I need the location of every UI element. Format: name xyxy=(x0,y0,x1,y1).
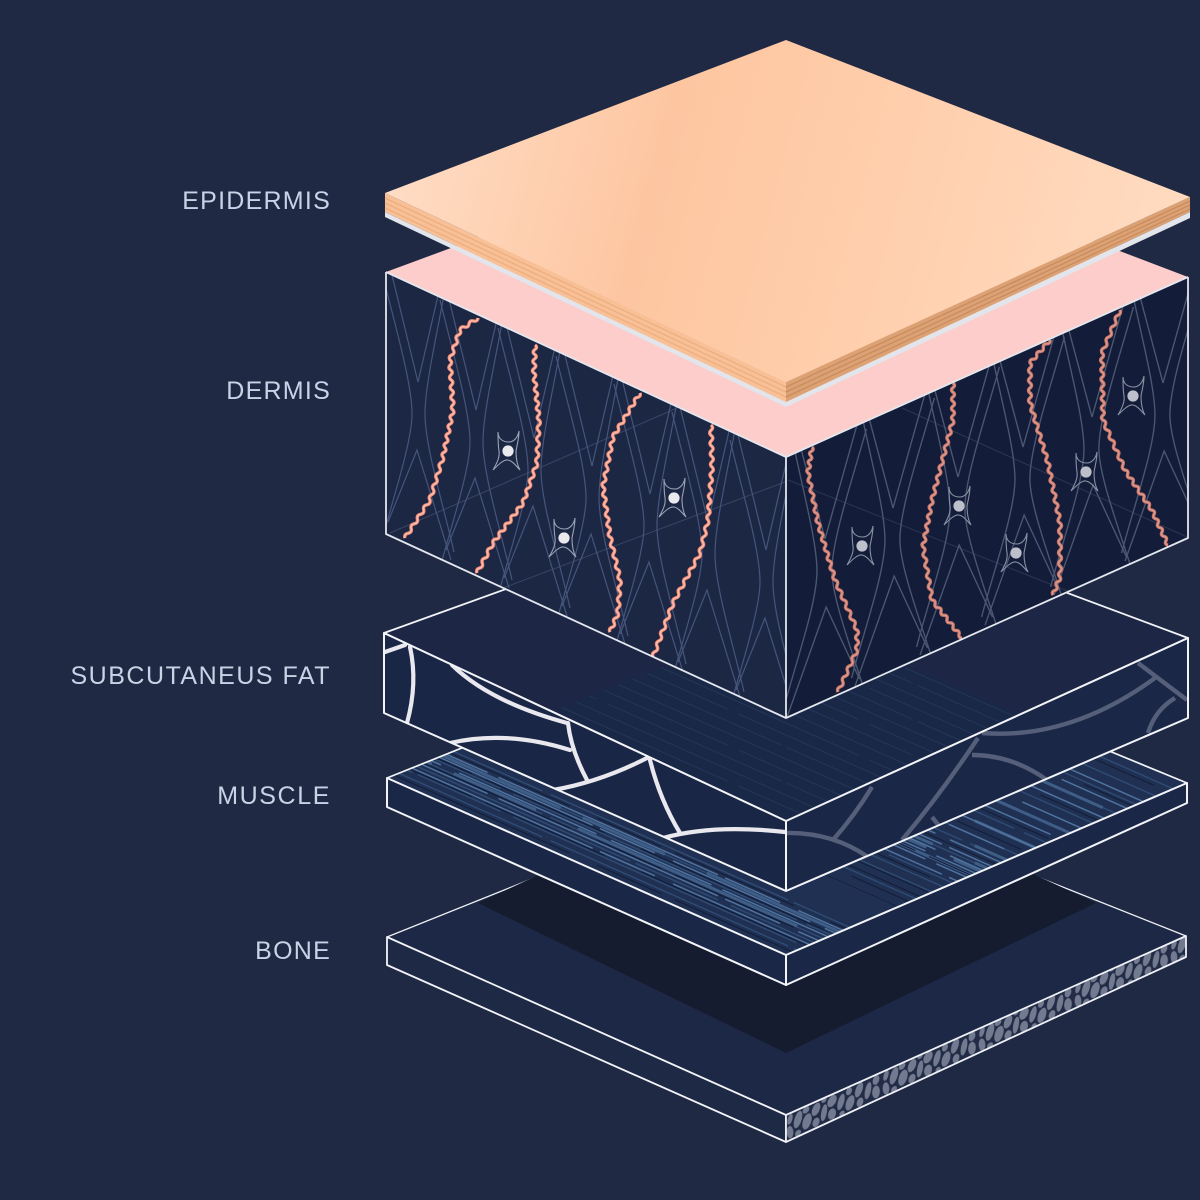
collagen fibres left xyxy=(386,276,786,696)
dermis right face xyxy=(784,268,1200,718)
muscle right side xyxy=(786,783,1187,985)
fibroblast cells left xyxy=(493,431,686,557)
dermis top surface xyxy=(386,124,1188,457)
epidermis left edge strata xyxy=(385,198,786,397)
collagen fibres right xyxy=(784,268,1200,717)
label: dermis: DERMIS xyxy=(226,377,331,405)
muscle top surface with fibres xyxy=(390,749,1184,954)
layer: dermis block xyxy=(385,238,1189,719)
fat top surface xyxy=(384,488,1188,821)
bone left side xyxy=(387,937,786,1142)
dermis left face xyxy=(386,276,786,709)
fat top muscle-like streaks xyxy=(561,668,1013,820)
dermis outline xyxy=(386,272,1188,718)
elastic fibres left xyxy=(405,318,713,657)
bone right side: porous texture xyxy=(786,936,1186,1142)
epidermis right edge xyxy=(786,197,1190,402)
label: muscle: MUSCLE xyxy=(217,782,331,810)
label: bone: BONE xyxy=(255,937,331,965)
epidermis top surface xyxy=(385,40,1190,382)
muscle left side xyxy=(387,778,786,985)
epidermis right edge strata xyxy=(786,201,1190,397)
label: subcutaneus fat: SUBCUTANEUS FAT xyxy=(70,662,331,690)
epidermis left edge xyxy=(385,193,786,402)
label: epidermis: EPIDERMIS xyxy=(182,187,331,215)
bone top surface xyxy=(387,777,1186,1115)
epidermis white underside xyxy=(385,212,1190,407)
shadow cast on bone xyxy=(478,760,1096,1053)
layer: bone slab xyxy=(387,760,1186,1142)
elastic fibres right xyxy=(807,310,1168,692)
layer: muscle slab xyxy=(386,748,1188,986)
layer: epidermis sheet xyxy=(385,40,1190,407)
layer: subcutaneous fat slab xyxy=(383,589,1189,892)
fat right connective network xyxy=(785,663,1187,857)
muscle top outline xyxy=(387,618,1187,955)
fat left connective network xyxy=(385,645,785,838)
fat left side xyxy=(384,633,786,891)
fibroblast cells right xyxy=(847,376,1145,572)
fat right side xyxy=(786,638,1188,891)
fat outline xyxy=(384,633,1188,891)
